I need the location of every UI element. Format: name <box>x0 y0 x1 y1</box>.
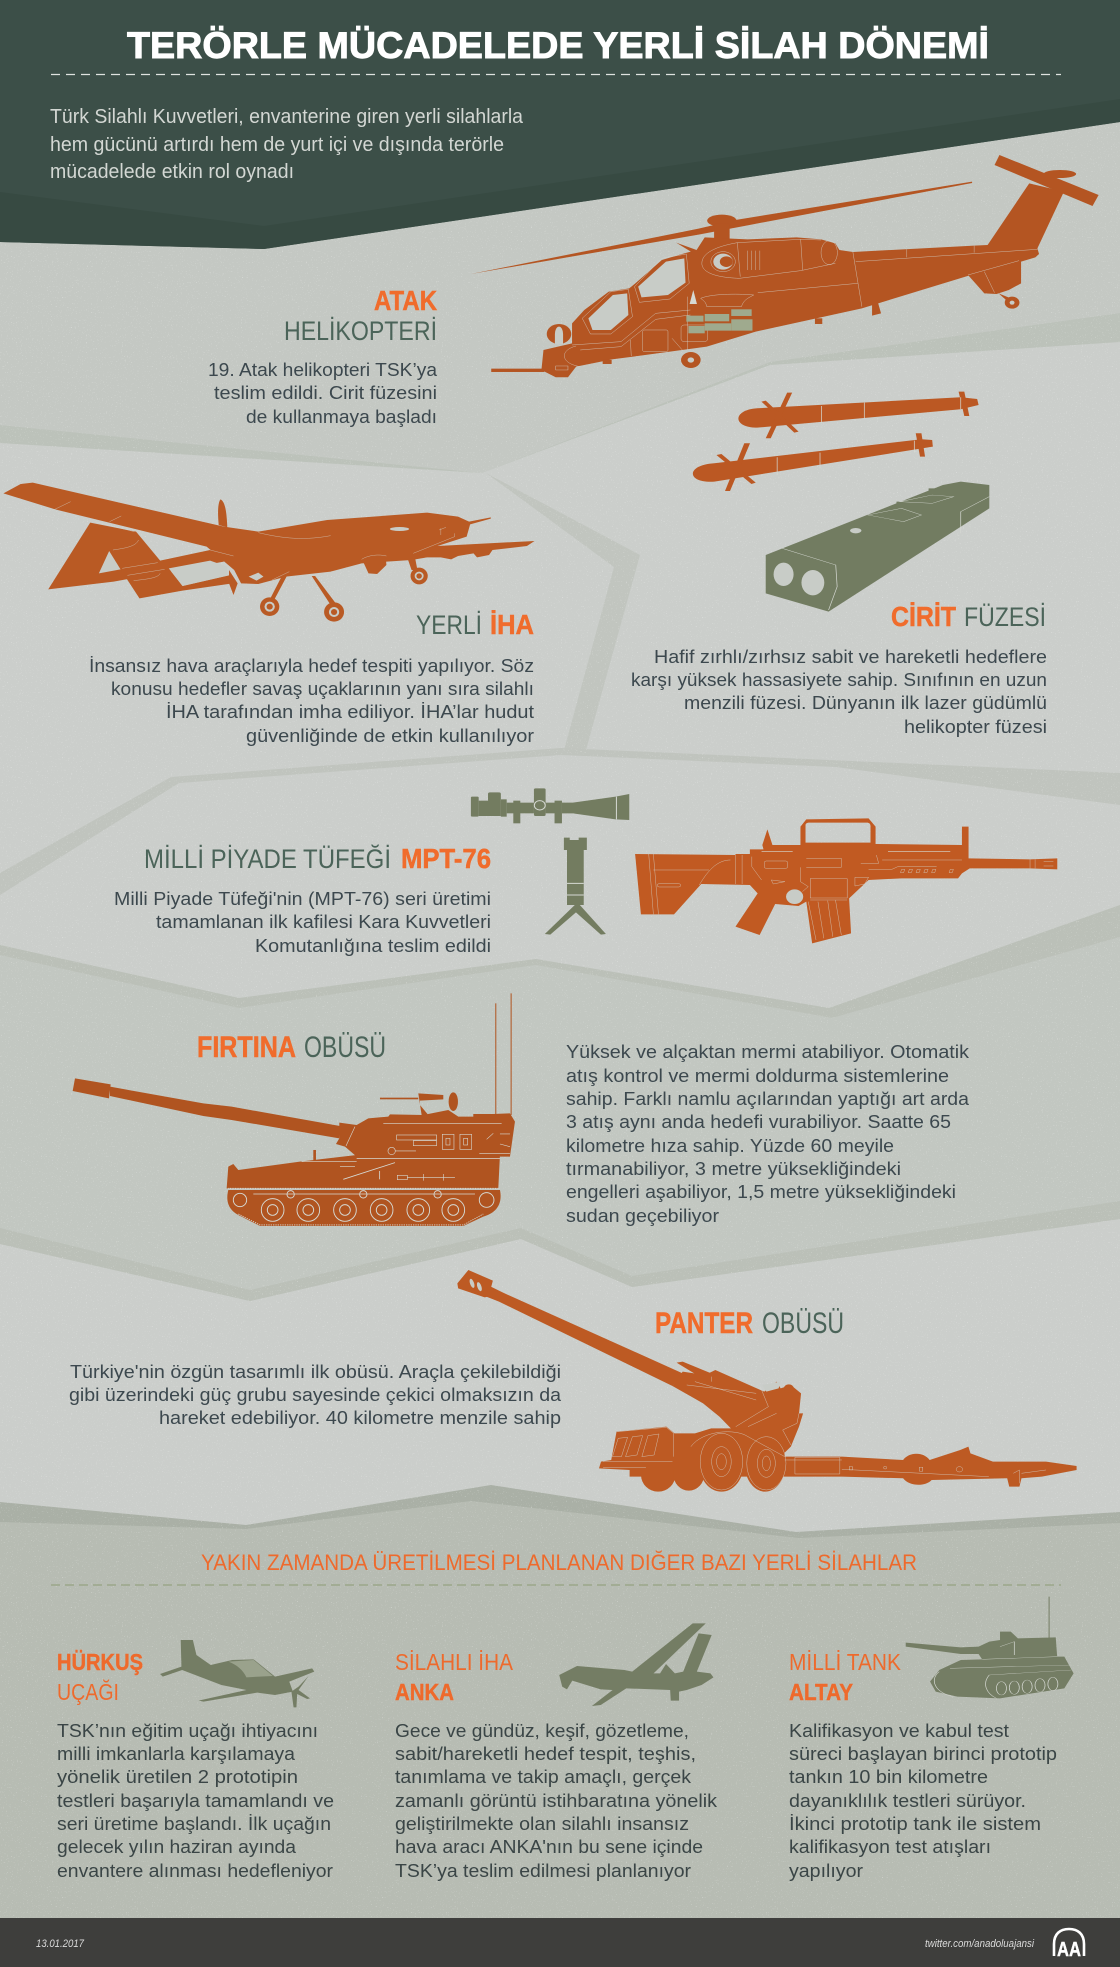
icon: anadolu agency logo <box>1054 1929 1084 1961</box>
panel: firtina obüsü <box>73 993 970 1226</box>
text: hürkuş description: testleri başarıyla tamamlandı ve <box>57 1791 334 1811</box>
text: firtina description: engelleri aşabiliyor, 1,5 metre yüksekliğindeki <box>566 1182 956 1202</box>
icon: helicopter <box>471 155 1099 377</box>
text: firtina description: tırmanabiliyor, 3 metre yüksekliğindeki <box>566 1159 901 1179</box>
text: panter description: gibi üzerindeki güç grubu sayesinde çekici olmaksızın da <box>69 1385 562 1405</box>
heading: anka: SİLAHLI İHA <box>395 1649 514 1675</box>
text: cirit description: Hafif zırhlı/zırhsız sabit ve hareketli hedeflere <box>654 647 1047 667</box>
text: atak description <box>208 360 438 427</box>
icon: rifle <box>635 818 1057 943</box>
text: firtina description <box>566 1042 970 1226</box>
text: hürkuş description: milli imkanlarla karşılamaya <box>57 1744 296 1764</box>
text: hürkuş description: envantere alınması hedefleniyor <box>57 1861 333 1881</box>
text: anka description <box>395 1721 718 1881</box>
icon: panter howitzer <box>457 1270 1077 1492</box>
panel: yerli iha <box>3 483 535 746</box>
intro text: mücadelede etkin rol oynadı <box>50 161 294 183</box>
heading: hürkuş: UÇAĞI <box>57 1679 119 1705</box>
heading: atak helikopteri: ATAK <box>374 285 437 316</box>
text: altay description: tankın 10 bin kilometre <box>789 1767 988 1787</box>
title: TERÖRLE MÜCADELEDE YERLİ SİLAH DÖNEMİ <box>127 25 989 66</box>
heading: firtina <box>197 1031 386 1064</box>
panel: atak helikopteri <box>208 155 1099 491</box>
text: altay description: yapılıyor <box>789 1861 863 1881</box>
text: anka description: TSK’ya teslim edilmesi planlanıyor <box>395 1861 691 1881</box>
heading: altay: ALTAY <box>789 1679 853 1705</box>
text: firtina description: 3 atış aynı anda hedefi vurabiliyor. Saatte 65 <box>566 1112 951 1132</box>
heading: yerli iha: İHA <box>490 609 534 640</box>
icon: cirit missiles <box>693 392 979 491</box>
text: atak description: 19. Atak helikopteri TSK’ya <box>208 360 438 380</box>
text: cirit description: menzili füzesi. Dünyanın ilk lazer güdümlü <box>684 693 1047 713</box>
icon: firtina howitzer <box>73 993 515 1226</box>
text: cirit description: helikopter füzesi <box>904 717 1047 737</box>
panel: header <box>0 0 1120 249</box>
text: anka description: zamanlı görüntü istihbaratına yönelik <box>395 1791 718 1811</box>
text: panter description: hareket edebiliyor. 40 kilometre menzile sahip <box>159 1408 561 1428</box>
heading: panter: PANTER <box>655 1307 753 1340</box>
icon: hürkuş plane <box>160 1640 314 1707</box>
panel: upcoming weapons <box>51 1550 1074 1881</box>
text: cirit description <box>631 647 1047 737</box>
icon: rifle scope <box>471 788 629 823</box>
card: altay <box>789 1597 1074 1881</box>
text: atak description: teslim edildi. Cirit füzesini <box>214 383 437 403</box>
heading: altay: MİLLİ TANK <box>789 1649 902 1675</box>
text: mpt-76 description: tamamlanan ilk kafilesi Kara Kuvvetleri <box>156 912 491 932</box>
social handle: twitter.com/anadoluajansi <box>925 1938 1034 1950</box>
card: anka <box>395 1623 718 1881</box>
heading: hürkuş <box>57 1649 143 1705</box>
heading: altay <box>789 1649 902 1705</box>
text: firtina description: atış kontrol ve mermi doldurma sistemlerine <box>566 1066 949 1086</box>
heading: anka <box>395 1649 514 1705</box>
heading: cirit füzesi: CİRİT <box>891 601 956 632</box>
text: altay description: kalifikasyon test atışları <box>789 1837 991 1857</box>
section heading: YAKIN ZAMANDA ÜRETİLMESİ PLANLANAN DIĞER BAZI YERLİ SİLAHLAR <box>201 1550 917 1575</box>
text: hürkuş description <box>57 1721 334 1881</box>
panel: panter obüsü <box>69 1270 1077 1492</box>
text: altay description: dayanıklılık testleri sürüyor. <box>789 1791 1026 1811</box>
text: anka description: hava aracı ANKA'nın bu sene içinde <box>395 1837 703 1857</box>
text: anka description: Gece ve gündüz, keşif, gözetleme, <box>395 1721 689 1741</box>
text: panter description: Türkiye'nin özgün tasarımlı ilk obüsü. Araçla çekilebildiği <box>70 1362 561 1382</box>
heading: panter <box>655 1307 844 1340</box>
footer <box>0 1918 1120 1967</box>
text: hürkuş description: seri üretime başlandı. İlk uçağın <box>57 1814 331 1834</box>
icon: missile launcher <box>766 482 989 612</box>
heading: atak helikopteri: HELİKOPTERİ <box>284 315 437 346</box>
text: iha description: İHA tarafından imha ediliyor. İHA’lar hudut <box>166 702 534 722</box>
heading: firtina: OBÜSÜ <box>304 1031 386 1064</box>
heading: atak helikopteri <box>284 285 437 346</box>
text: mpt-76 description: Komutanlığına teslim edildi <box>255 936 491 956</box>
icon: anadolu agency logo: AA <box>1057 1939 1081 1961</box>
text: firtina description: sudan geçebiliyor <box>566 1206 719 1226</box>
text: firtina description: Yüksek ve alçaktan mermi atabiliyor. Otomatik <box>566 1042 970 1062</box>
icon: uav drone <box>3 483 535 622</box>
heading: mpt-76: MPT-76 <box>401 843 491 874</box>
icon: foregrip bipod <box>545 838 606 935</box>
heading: anka: ANKA <box>395 1679 454 1705</box>
icon: anka drone <box>559 1623 713 1706</box>
text: mpt-76 description <box>114 889 491 956</box>
text: mpt-76 description: Milli Piyade Tüfeği'nin (MPT-76) seri üretimi <box>114 889 491 909</box>
text: panter description <box>69 1362 562 1428</box>
heading: yerli iha: YERLİ <box>416 609 482 640</box>
panel: cirit füzesi <box>631 482 1047 737</box>
heading: cirit füzesi <box>891 601 1046 632</box>
text: firtina description: kilometre hıza sahip. Yüzde 60 meyile <box>566 1136 894 1156</box>
text: iha description: güvenliğinde de etkin kullanılıyor <box>246 726 534 746</box>
text: hürkuş description: gelecek yılın haziran ayında <box>57 1837 297 1857</box>
text: anka description: geliştirilmekte olan silahlı insansız <box>395 1814 689 1834</box>
intro text: hem gücünü artırdı hem de yurt içi ve dışında terörle <box>50 134 504 156</box>
heading: yerli iha <box>416 609 534 640</box>
text: iha description: İnsansız hava araçlarıyla hedef tespiti yapılıyor. Söz <box>89 656 534 676</box>
text: altay description: İkinci prototip tank ile sistem <box>789 1814 1041 1834</box>
date: 13.01.2017 <box>36 1938 85 1950</box>
intro text: Türk Silahlı Kuvvetleri, envanterine giren yerli silahlarla <box>50 106 524 128</box>
text: hürkuş description: yönelik üretilen 2 prototipin <box>57 1767 298 1787</box>
text: anka description: tanımlama ve takip amaçlı, gerçek <box>395 1767 692 1787</box>
text: iha description: konusu hedefler savaş uçaklarının yanı sıra silahlı <box>111 679 534 699</box>
panel: mpt-76 <box>114 788 1057 956</box>
text: altay description: Kalifikasyon ve kabul test <box>789 1721 1009 1741</box>
intro text <box>50 106 524 183</box>
heading: panter: OBÜSÜ <box>762 1307 844 1340</box>
card: hürkuş <box>57 1640 334 1881</box>
heading: firtina: FIRTINA <box>197 1031 296 1064</box>
text: hürkuş description: TSK’nın eğitim uçağı ihtiyacını <box>57 1721 318 1741</box>
text: firtina description: sahip. Farklı namlu açılarından yaptığı art arda <box>566 1089 970 1109</box>
heading: mpt-76: MİLLİ PİYADE TÜFEĞİ <box>144 843 391 874</box>
text: iha description <box>89 656 534 746</box>
heading: hürkuş: HÜRKUŞ <box>57 1649 143 1675</box>
heading: cirit füzesi: FÜZESİ <box>964 601 1046 632</box>
text: altay description: süreci başlayan birinci prototip <box>789 1744 1057 1764</box>
text: cirit description: karşı yüksek hassasiyete sahip. Sınıfının en uzun <box>631 670 1047 690</box>
text: atak description: de kullanmaya başladı <box>246 407 437 427</box>
text: altay description <box>789 1721 1057 1881</box>
text: anka description: sabit/hareketli hedef tespit, teşhis, <box>395 1744 696 1764</box>
icon: altay tank <box>906 1597 1074 1698</box>
